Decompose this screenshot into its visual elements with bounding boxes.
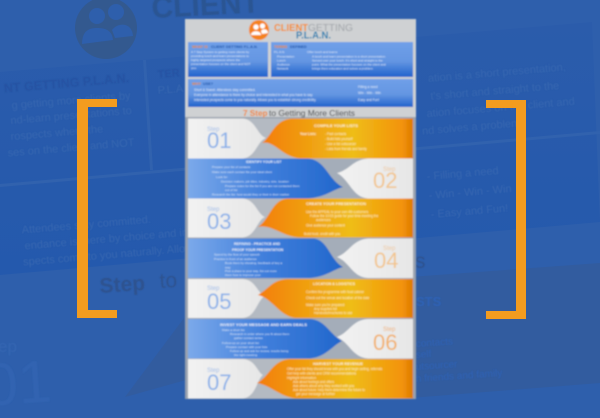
step 01 row: Step (207, 127, 220, 133)
step 04 row: Practice in front of an audience (214, 257, 257, 261)
step 06 row: INVEST YOUR MESSAGE AND EARN DEALS (220, 323, 308, 327)
step 01 row: - Past contacts (325, 132, 346, 136)
step 06 row: Step (383, 327, 396, 333)
step 05 row: Any supplies list (314, 307, 337, 311)
background faded text: self (415, 349, 432, 361)
step 06 row: Follow-up on your short list (222, 341, 259, 345)
step 03 row: audiences (316, 218, 331, 222)
panel: terms defined: point. What the presentation focuses on the client and (312, 62, 386, 66)
step 05 row: LOCATION & LOGISTICS (313, 282, 355, 286)
infographic poster (185, 19, 416, 399)
step 02 row: 02 (373, 168, 397, 193)
step 02 row: out of list (225, 188, 238, 192)
panel: what is: presentation focuses on the client and NOT (191, 62, 251, 66)
poster sheet (185, 19, 416, 399)
background faded text: - Win - Win - Win (428, 183, 512, 202)
background faded text: NT GETTING P.L.A.N. (3, 71, 130, 96)
step 02 row: Look for: (216, 175, 228, 179)
background faded text: h friends and family (415, 368, 503, 385)
step 04 row: way (225, 266, 231, 270)
step 02 row: Make sure each contact fits your ideal client (212, 170, 272, 174)
background faded text: ation focuses on the client and (426, 96, 575, 120)
poster grey side edges (185, 117, 416, 399)
step 01 row: Your Lists: (300, 132, 316, 136)
step 04 row: them how to improve your (225, 273, 261, 277)
panel: terms defined: brings them education and solves a problem. (312, 66, 374, 70)
step 03 row: CREATE YOUR PRESENTATION (306, 202, 366, 206)
panel: what is: highly targeted prospects where the (191, 58, 240, 62)
step 02 row: Step (383, 167, 396, 173)
step 01 row: 01 (207, 128, 231, 153)
step 04 row: REFINING - PRACTICE AND (234, 242, 281, 246)
step 02 row: Research the list: how would they or their in their market (212, 192, 289, 196)
background faded text: endance is there by choice and inte (24, 226, 198, 252)
heading: 7 steps: to Getting More Clients (269, 109, 355, 118)
title plan: P.L.A.N. (296, 30, 331, 42)
panel: terms defined: Network (277, 66, 289, 70)
step 03 row: Follow the 10/15 guide for your time meeting the (310, 214, 378, 218)
step 01 row (188, 118, 413, 158)
panel: why: Easy and Fun! (358, 98, 379, 102)
icon: client circle (249, 20, 269, 40)
step 02 row: Prepare notes for the list if you are not contacted them (225, 184, 300, 188)
step 06 row: Prepare contact with your lists (226, 345, 268, 349)
panel: terms defined (271, 42, 413, 77)
background faded text: to (159, 269, 178, 293)
panel: terms defined: A lunch and learn presentation is a short presentation. (312, 54, 386, 58)
step 06 row: the right meeting (234, 353, 257, 357)
step 07 row (188, 359, 413, 398)
step 02 row: IDENTIFY YOUR LIST (246, 160, 282, 164)
panel: what is: you. (191, 66, 197, 70)
panel: why: Interested prospects come to you naturally. Allows you to establish strong credibility. (194, 98, 316, 102)
background faded text: contacts (415, 336, 453, 350)
step 04 row: Pick a place to your way, list out more (225, 269, 277, 273)
background faded text: ses on the client and NOT (7, 137, 135, 159)
background faded text: - Filling a need (426, 165, 499, 183)
panel: why (188, 79, 413, 107)
step 04 row: 04 (374, 248, 398, 273)
background faded text: ation is a short presentation, (428, 61, 566, 85)
step 05 row: Step (207, 286, 220, 292)
step 01 row: - Use a list outsourcer (325, 142, 357, 146)
step 07 row: Ask about feelings and offers (293, 380, 334, 384)
step 07 row: HARVEST YOUR REVENUE (313, 362, 363, 366)
step 05 row: Confirm the programme with food caterer (306, 290, 365, 294)
title: CLIENT (274, 23, 308, 34)
step 03 row: Step (207, 207, 220, 213)
step 07 row: Get help with clients and CRM recommendations (287, 372, 356, 376)
step 03 row: 03 (207, 209, 231, 234)
panel: terms defined: Presentation (277, 54, 295, 58)
panel: why: Short & Sweet. Attendees stay committed. (194, 88, 256, 92)
step 02 row (188, 158, 413, 198)
background faded text: spects come to you naturally. Allows (23, 242, 199, 269)
step 07 row: get your message at further (296, 392, 336, 396)
panel: terms defined: Audience (277, 62, 290, 66)
step 05 row: Handouts/brochures to use (314, 311, 353, 315)
heading: 7 steps: 7 Step (243, 109, 268, 118)
step 06 row: Make a short list (222, 328, 245, 332)
step 07 row: Highlight information (287, 376, 316, 380)
step 06 row: 06 (373, 330, 397, 355)
step 03 row: Build trust, credit with you (304, 232, 341, 236)
step 01 row: - Lists from friends and family (325, 147, 367, 151)
step 01 row: COMPILE YOUR LISTS (314, 124, 358, 128)
header (249, 20, 353, 42)
step 07 row: Ask about future: help them determine the future to (293, 388, 365, 392)
panel: terms defined: Offer lunch and learns (307, 50, 338, 54)
panel: what is: providing lunch-and-learn presentations to (191, 54, 249, 58)
panel: terms defined: P.L.A.N. (274, 50, 285, 54)
step 07 row: Step (207, 368, 220, 374)
step 05 row: 05 (207, 289, 231, 314)
header: GETTING (308, 23, 353, 34)
background faded text: Step (99, 272, 146, 298)
panel: why: WHY (192, 82, 201, 86)
background faded text: STS (416, 294, 442, 309)
background faded text: utsourcer (415, 359, 458, 373)
background faded text: - Easy and Fun! (430, 203, 509, 221)
step 06 row: gather contact series (234, 336, 263, 340)
background faded text: Attendees stay committed. (21, 214, 151, 237)
panel: what is: A 7 Step System to getting more clients by (191, 50, 250, 54)
panel: why: Filling a need (358, 85, 378, 89)
left bracket (77, 99, 117, 318)
background faded text: s (415, 250, 426, 273)
step 04 row: PROOF YOUR PRESENTATION (232, 248, 284, 252)
step 06 row: Research in order where you fit about them (230, 332, 290, 336)
background faded text: TER (157, 67, 180, 81)
panel: why: Win - Win - Win (358, 91, 381, 95)
panel: what is: CLIENT GETTING P.L.A.N. (211, 45, 258, 49)
step 04 row: Step (383, 246, 396, 252)
panel: why: Everyone in attendance is there by choice and interested in what you have to say. (194, 93, 313, 97)
background faded text: g getting more clients by (11, 90, 131, 112)
step 03 row (188, 198, 413, 238)
step 04 row (188, 238, 413, 278)
step 04 row: Book them by showing, feedback of key a (225, 261, 282, 265)
panel: terms defined: Served over your lunch. It's short and straight to the (312, 58, 383, 62)
panel: what is: WHAT IS (192, 45, 208, 49)
panel: terms defined: TERMS (274, 45, 288, 49)
step 02 row: Decision makers, job titles, industry, size, location (221, 180, 289, 184)
step 05 row: Make sure you're prepared: (306, 303, 345, 307)
background faded text: nd-learn presentations to (10, 105, 132, 127)
background faded text: t's short and straight to the (430, 80, 560, 103)
step 07 row: Offer your list they should know with you and begin selling, referrals (287, 367, 383, 371)
background faded text: nd solves a problem (422, 117, 521, 138)
step 05 row: Check out the venue and location of the date (306, 296, 369, 300)
panel: terms defined: DEFINED (290, 45, 307, 49)
background icon: people circle (75, 0, 137, 59)
step 06 row (188, 319, 413, 358)
step 01 row: - Build lists yourself (325, 137, 353, 141)
step 07 row: 07 (207, 370, 231, 395)
right bracket (486, 100, 526, 319)
step 06 row: Follow up and ask for review, results being (230, 349, 289, 353)
step 07 row: Ask others about why they worked with you (293, 384, 354, 388)
background faded text: P.L.A (157, 83, 184, 97)
step 05 row (188, 279, 413, 318)
step 02 row: Prepare your list of contacts (212, 165, 251, 169)
step 03 row: Give audience your content (306, 224, 345, 228)
panel: terms defined: Lunch (277, 58, 286, 62)
panel: what is (188, 42, 268, 77)
panel: why: USE? (203, 82, 214, 86)
step 03 row: Use the APPEAL to your own 4th customers (306, 210, 369, 214)
background faded text: rospects where the (10, 123, 104, 143)
step 04 row: Spend by the flow of your speech (214, 252, 260, 256)
